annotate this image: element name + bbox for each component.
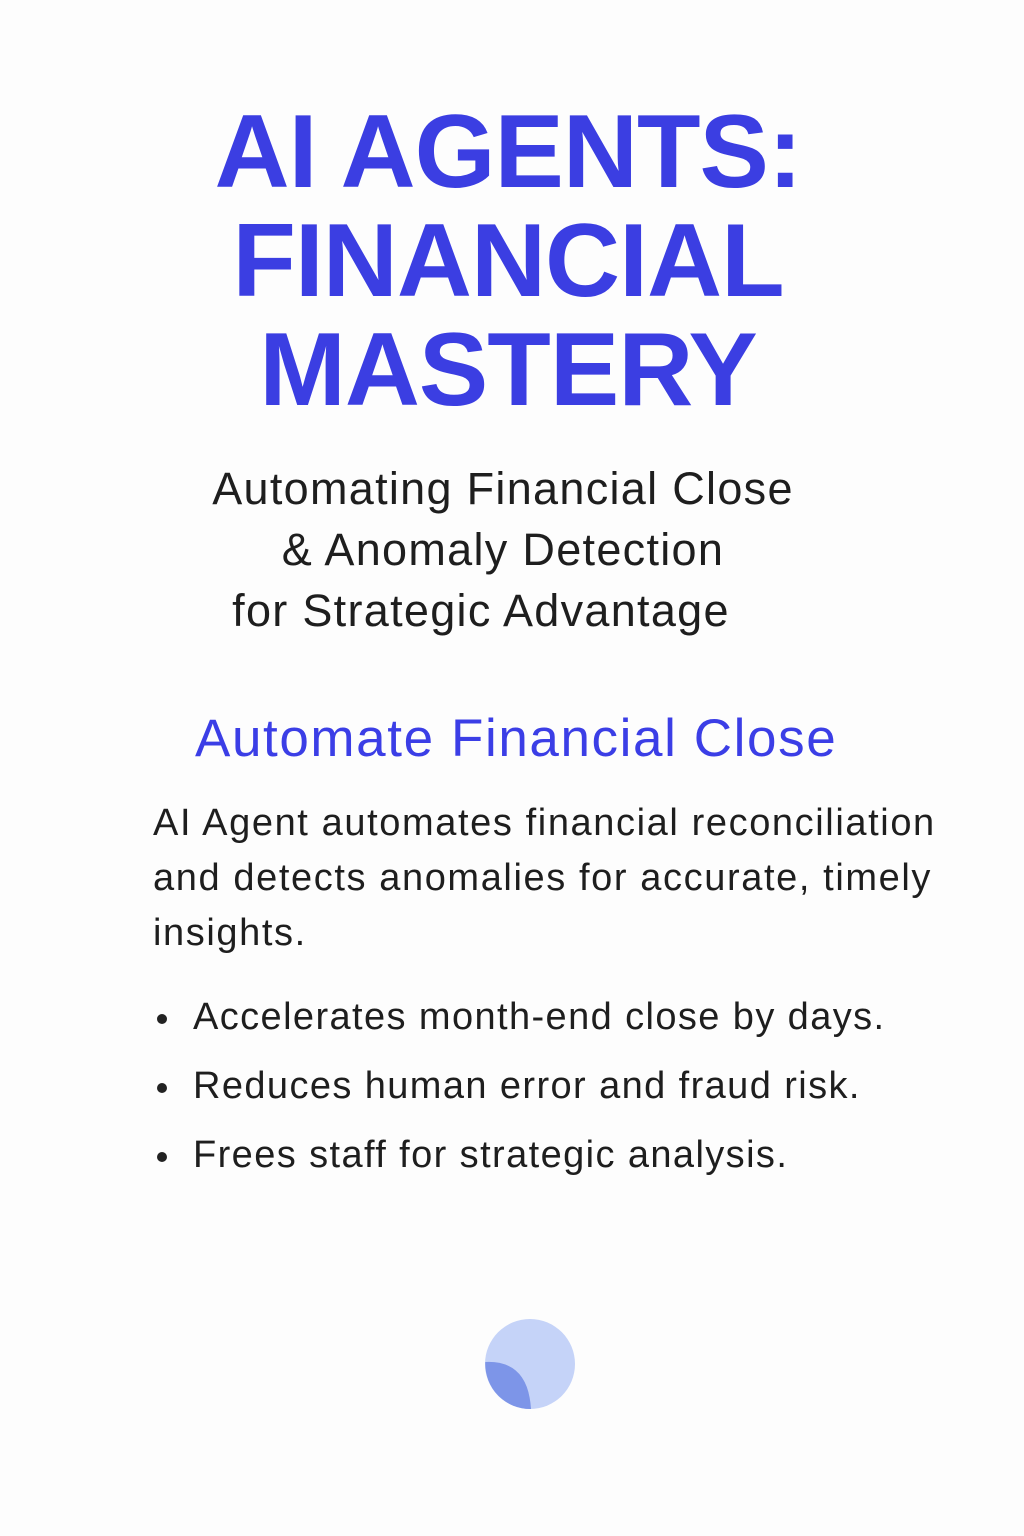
- description paragraph: and detects anomalies for accurate, timely: [153, 857, 932, 899]
- bullet list: Reduces human error and fraud risk.: [193, 1065, 861, 1107]
- bullet list: [157, 996, 886, 1176]
- subtitle: Automating Financial Close: [212, 463, 794, 514]
- subtitle: & Anomaly Detection: [282, 524, 724, 575]
- description paragraph: insights.: [153, 912, 307, 954]
- title: [214, 94, 802, 428]
- title: AI AGENTS:: [214, 94, 802, 210]
- bullet list: Frees staff for strategic analysis.: [193, 1134, 788, 1176]
- bullet list: Accelerates month-end close by days.: [193, 996, 886, 1038]
- subtitle: [212, 463, 794, 636]
- description paragraph: [153, 802, 936, 954]
- section heading: Automate Financial Close: [195, 709, 837, 768]
- title: FINANCIAL: [232, 203, 784, 319]
- description paragraph: AI Agent automates financial reconciliation: [153, 802, 936, 844]
- subtitle: for Strategic Advantage: [232, 585, 730, 636]
- title: MASTERY: [259, 312, 757, 428]
- icon: circle logo: [485, 1319, 575, 1409]
